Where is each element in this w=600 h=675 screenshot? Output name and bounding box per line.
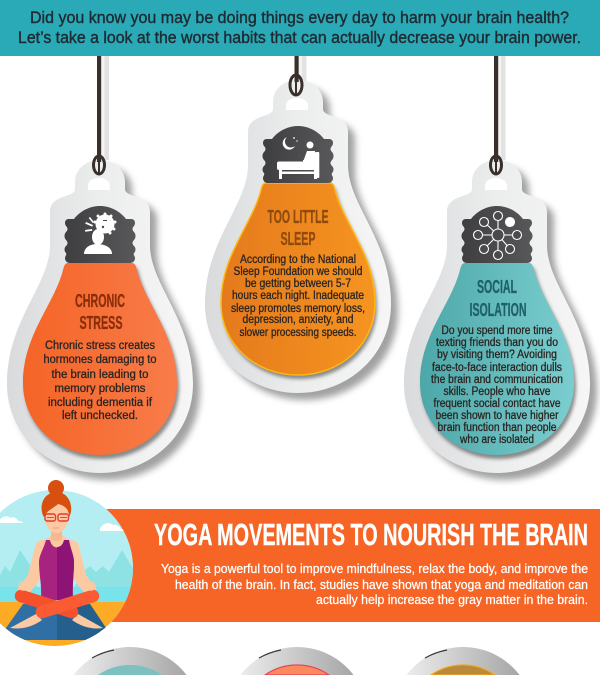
- bulb: social isolation: [404, 56, 597, 480]
- bulb: too little sleep: be getting between 5-7: [245, 278, 351, 290]
- bulb: too little sleep: depression, anxiety, and: [242, 314, 354, 326]
- bulb: too little sleep: slower processing speeds.: [240, 327, 356, 339]
- woman figure: [10, 480, 103, 629]
- icon: person in bed with moon: [277, 137, 319, 179]
- bulb: chronic stress: the brain leading to: [52, 369, 148, 381]
- bulb: chronic stress: including dementia if: [48, 397, 153, 409]
- bulb: social isolation: by visiting them? Avoiding: [437, 349, 557, 361]
- bulb: chronic stress: Chronic stress creates: [45, 340, 155, 352]
- bulb: social isolation: brain function than people: [438, 422, 556, 434]
- bulb: social isolation: been shown to have higher: [436, 410, 559, 422]
- bulb: social isolation: Do you spend more time: [442, 325, 552, 337]
- bulb: social isolation: ISOLATION: [470, 300, 526, 320]
- header banner: Did you know you may be doing things every day to harm your brain health?: [30, 9, 569, 27]
- partial circle badge: gold: [406, 647, 520, 675]
- bulb: social isolation: SOCIAL: [477, 277, 517, 297]
- partial circle badge: red: [240, 647, 354, 675]
- icon: social network: [474, 212, 522, 260]
- bulb: chronic stress: hormones damaging to: [44, 354, 156, 366]
- icon: stressed head: [84, 212, 116, 254]
- header banner: [0, 0, 600, 56]
- bulb: social isolation: the brain and communication: [431, 374, 563, 386]
- bulb: social isolation: skills. People who have: [444, 386, 550, 398]
- bulb: social isolation: who are isolated: [459, 434, 534, 446]
- illustration: woman meditating: [0, 480, 134, 648]
- header banner: Let’s take a look at the worst habits that can actually decrease your brain power.: [18, 29, 581, 47]
- bulb: chronic stress: CHRONIC: [75, 291, 125, 311]
- bulb: too little sleep: [205, 56, 398, 400]
- bulb: too little sleep: Sleep Foundation we should: [234, 266, 362, 278]
- bulb: too little sleep: TOO LITTLE: [268, 207, 328, 227]
- banner text: actually help increase the gray matter in the brain.: [316, 592, 588, 607]
- bulb: social isolation: face-to-face interaction dulls: [432, 362, 562, 374]
- bulb: too little sleep: SLEEP: [280, 229, 316, 249]
- bulb: social isolation: frequent social contact have: [434, 398, 560, 410]
- partial circle badge: teal: [74, 647, 186, 675]
- bulb: too little sleep: sleep promotes memory loss,: [231, 303, 365, 315]
- bulb: chronic stress: [7, 56, 200, 480]
- banner text: [161, 561, 588, 607]
- bulb: social isolation: texting friends than you do: [436, 337, 558, 349]
- bulb: chronic stress: left unchecked.: [62, 410, 138, 422]
- bulb: chronic stress: memory problems: [54, 383, 146, 395]
- bulb: chronic stress: STRESS: [80, 313, 122, 333]
- bulb: too little sleep: According to the National: [240, 254, 356, 266]
- bulb: too little sleep: hours each night. Inadequate: [232, 290, 364, 302]
- yoga banner: [106, 509, 600, 622]
